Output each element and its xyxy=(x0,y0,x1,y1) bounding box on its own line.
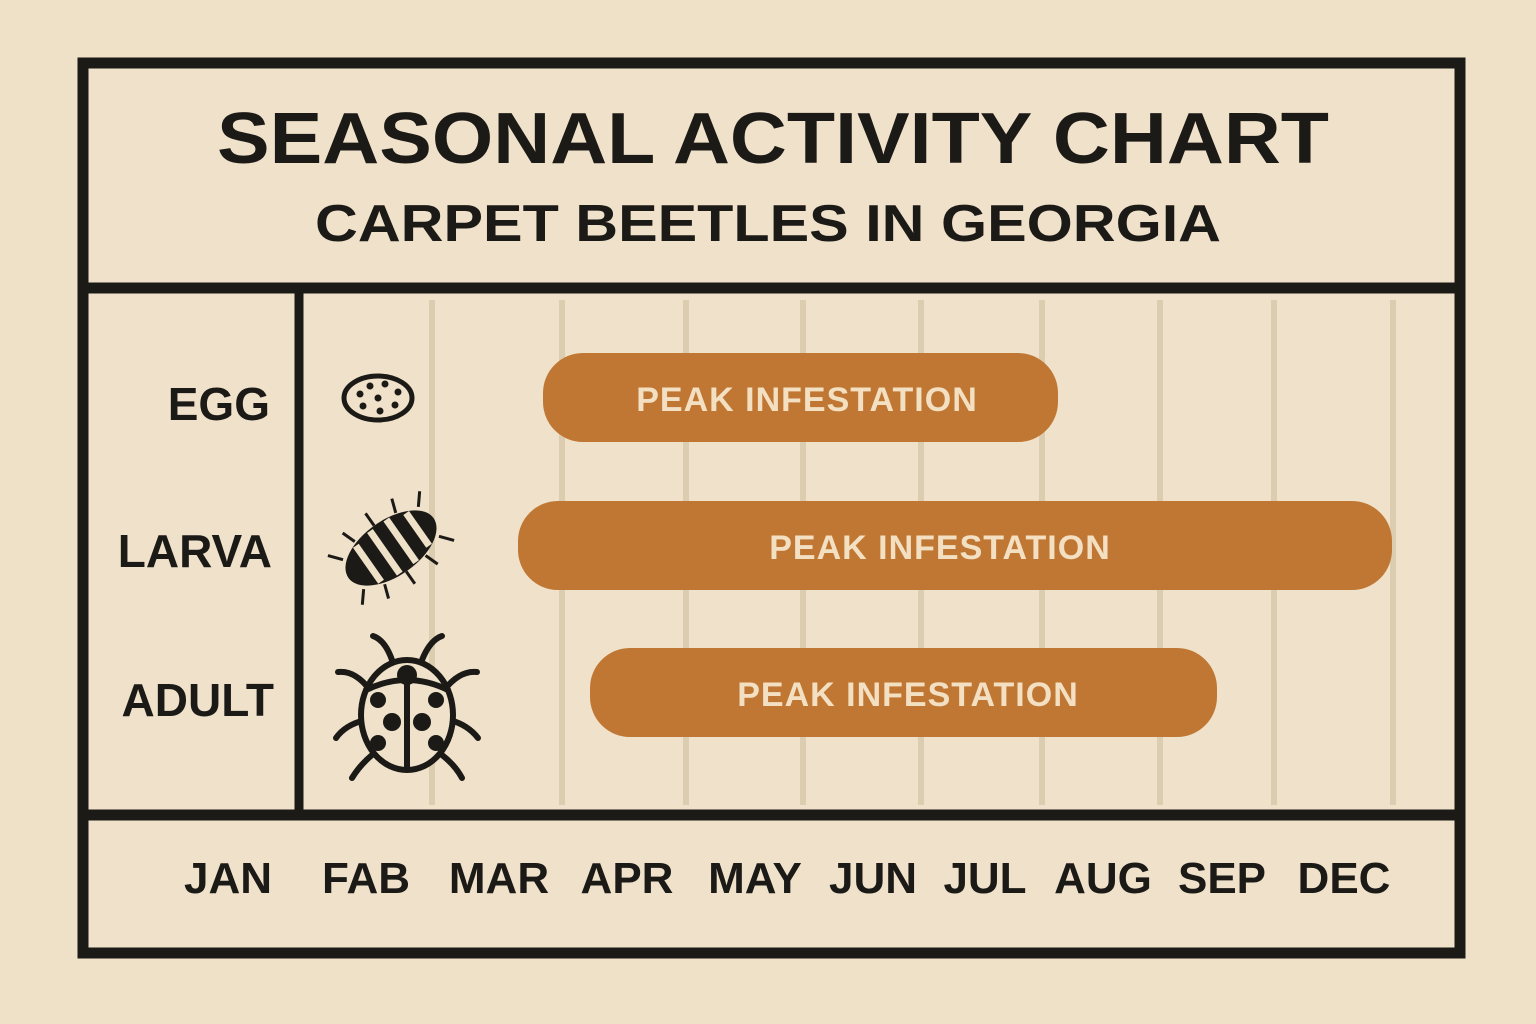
month axis labels: APR xyxy=(581,854,673,903)
row labels: LARVA xyxy=(118,525,272,577)
row labels xyxy=(118,378,274,726)
row labels: EGG xyxy=(168,378,270,430)
month axis labels: MAY xyxy=(708,854,802,903)
month axis labels: JUL xyxy=(943,854,1027,903)
bar: larva peak infestation xyxy=(518,501,1392,590)
bar: larva peak infestation: PEAK INFESTATION xyxy=(769,529,1111,567)
bar: adult peak infestation xyxy=(590,648,1217,737)
icon: larva xyxy=(320,481,462,615)
bar: egg peak infestation: PEAK INFESTATION xyxy=(636,381,978,419)
month axis labels: AUG xyxy=(1054,854,1152,903)
bar: egg peak infestation xyxy=(543,353,1058,442)
subtitle: CARPET BEETLES IN GEORGIA xyxy=(315,195,1221,253)
title: SEASONAL ACTIVITY CHART xyxy=(217,99,1329,179)
bar: adult peak infestation: PEAK INFESTATION xyxy=(737,676,1079,714)
month axis labels: MAR xyxy=(449,854,549,903)
month axis labels: JAN xyxy=(184,854,272,903)
month axis labels xyxy=(184,854,1390,903)
month axis labels: DEC xyxy=(1298,854,1390,903)
icon: adult beetle xyxy=(336,636,478,778)
row labels: ADULT xyxy=(122,674,274,726)
month axis labels: FAB xyxy=(322,854,410,903)
icon: egg xyxy=(344,376,412,420)
month axis labels: JUN xyxy=(829,854,917,903)
chart frame xyxy=(83,63,1460,953)
month axis labels: SEP xyxy=(1178,854,1266,903)
